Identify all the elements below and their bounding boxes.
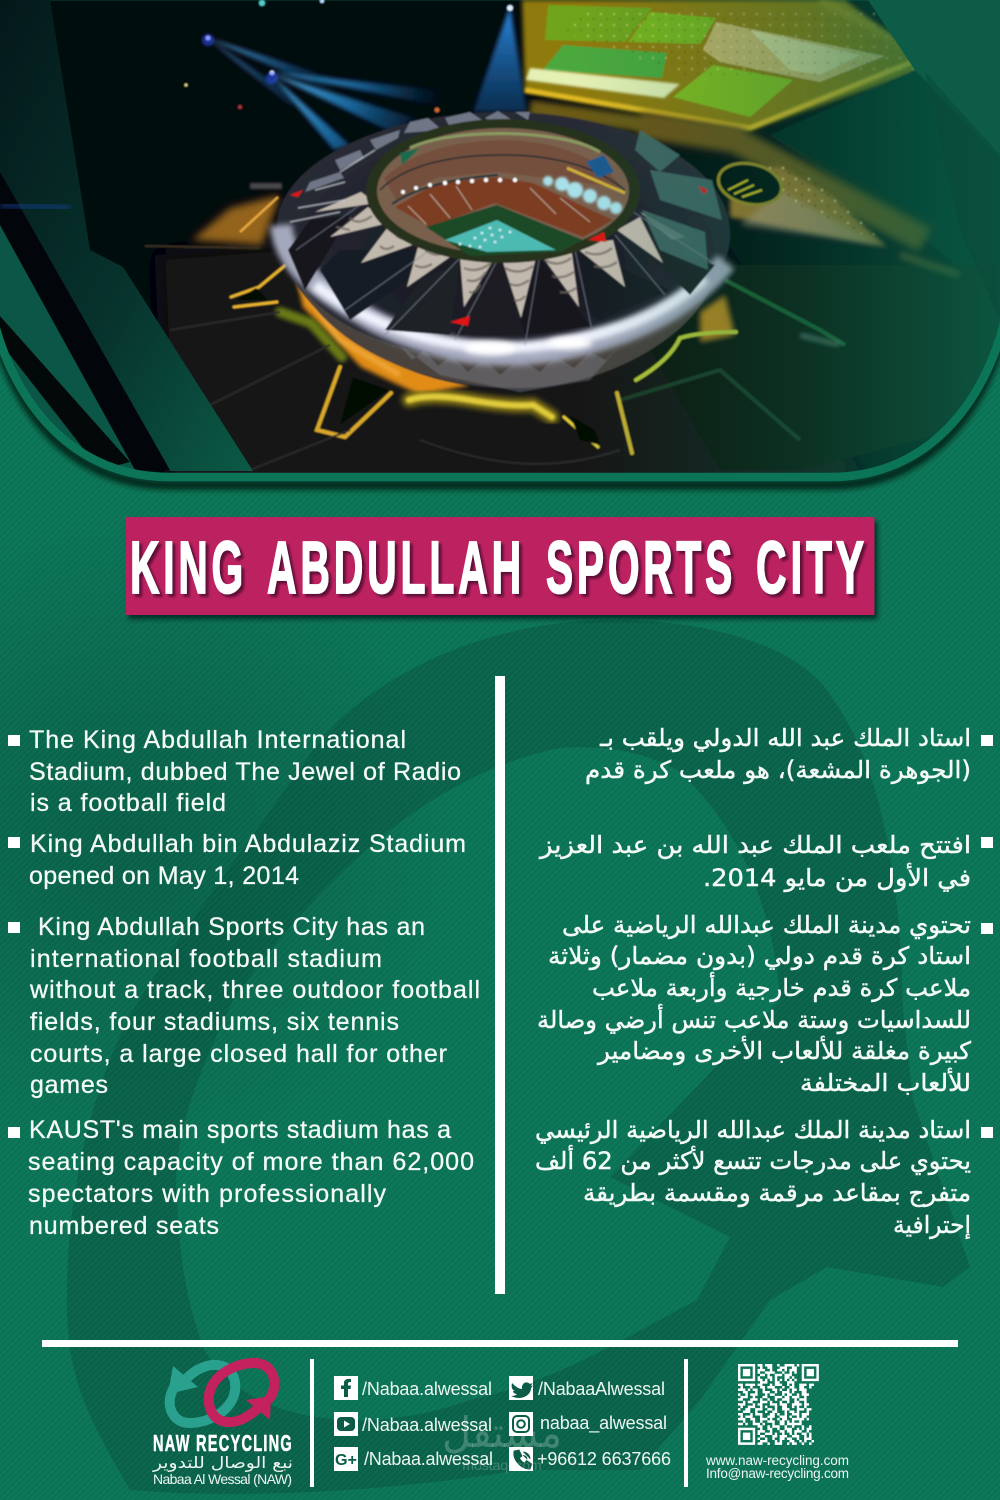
icon: twitter (511, 1382, 533, 1398)
social links: +96612 6637666 (537, 1449, 671, 1469)
panel: English text: King Abdullah Sports City has an (38, 913, 425, 941)
social links: /Nabaa.alwessal (364, 1449, 493, 1469)
watermark: mostaql: mostaql.com (462, 1457, 542, 1473)
logo: NAW Recycling: نبع الوصال للتدوير (152, 1453, 293, 1473)
central divider (495, 676, 505, 1294)
panel: English text: KAUST's main sports stadium has a (29, 1116, 451, 1144)
social links: nabaa_alwessal (540, 1413, 667, 1434)
logo: NAW Recycling: Nabaa Al Wessal (NAW) (153, 1471, 292, 1487)
upper tier stands (384, 140, 622, 200)
panel: Arabic text: استاد كرة قدم دولي (بدون مضمار) وثلاثة (548, 942, 971, 970)
panel: English text: is a football field (30, 789, 226, 817)
panel: Arabic text: للسداسيات وستة ملاعب تنس أرضي وصالة (537, 1004, 971, 1034)
icon: phone (514, 1450, 532, 1469)
logo: NAW Recycling (152, 1363, 293, 1487)
lower tier stands (395, 177, 613, 237)
pitch (426, 205, 583, 256)
stadium body (277, 111, 730, 392)
red lights (290, 186, 708, 326)
title text: ABDULLAH (267, 526, 525, 609)
photo frame shadow (0, 325, 1000, 485)
panel: Arabic text: ملاعب كرة قدم خارجية وأربعة ملاعب (592, 972, 971, 1002)
green overlay shards on right (605, 0, 1000, 473)
right plaza and oval (620, 70, 962, 457)
panel: Arabic text (535, 724, 993, 1240)
icon: instagram (513, 1416, 529, 1432)
title text: SPORTS (546, 526, 736, 609)
title banner (126, 517, 874, 615)
petals (315, 192, 686, 318)
logo mark: interlocking arrows (168, 1363, 274, 1423)
panel: English text: without a track, three outdoor football (29, 976, 480, 1004)
panel: Arabic text: تحتوي مدينة الملك عبدالله الرياضية على (562, 911, 971, 939)
panel: Arabic text: في الأول من مايو 2014. (703, 863, 971, 892)
apron lines (170, 312, 620, 470)
panel: Arabic text: استاد الملك عبد الله الدولي ويلقب بـ (599, 724, 971, 752)
watermark: mostaql: مستقل (442, 1408, 562, 1457)
title text: KING (130, 526, 247, 609)
website and email (705, 1453, 849, 1481)
social links: /Nabaa.alwessal (362, 1415, 492, 1435)
panel: English text: The King Abdullah International (29, 726, 406, 754)
QR code (738, 1365, 818, 1444)
sports fields, upper right (518, 0, 916, 134)
panel: English text: international football stadium (30, 945, 382, 973)
footer rule (42, 1340, 958, 1347)
panel: Arabic text: (الجوهرة المشعة)، هو ملعب كرة قدم (585, 756, 971, 784)
orange forecourt glow (296, 277, 470, 395)
hero photo: stadium at night (0, 0, 1000, 480)
left plaza lights (145, 183, 282, 248)
lower facade (300, 285, 712, 388)
stadium radial structure lines (296, 205, 712, 345)
panel: English text: seating capacity of more than 62,000 (28, 1148, 474, 1176)
panel: English text: numbered seats (29, 1212, 219, 1240)
website and email: www.naw-recycling.com (705, 1453, 849, 1468)
title text: CITY (756, 526, 868, 609)
upper back roof panels (305, 111, 530, 192)
panel: Arabic text: إحترافية (893, 1211, 971, 1240)
icon: youtube (337, 1417, 355, 1431)
icon: google plus: G+ (335, 1452, 357, 1469)
panel: Arabic text: كبيرة مغلقة للألعاب الأخرى ومضامير (597, 1036, 972, 1065)
panel: English text: opened on May 1, 2014 (29, 862, 299, 890)
stand lights and glass boxes (401, 178, 517, 194)
panel: English text: Stadium, dubbed The Jewel of Radio (29, 758, 461, 786)
panel: Arabic text: استاد مدينة الملك عبدالله الرياضية الرئيسي (535, 1116, 971, 1144)
panel: English text: games (30, 1071, 108, 1099)
panel: Arabic text: افتتح ملعب الملك عبد الله بن عبد العزيز (539, 831, 971, 859)
panel: English text: courts, a large closed hall for other (30, 1040, 447, 1068)
dark roof panels (288, 215, 350, 290)
social links: /NabaaAlwessal (538, 1379, 665, 1399)
panel: English text: spectators with professionally (28, 1180, 386, 1208)
panel: Arabic text: متفرج بمقاعد مرقمة ومقسمة بطريقة (583, 1179, 971, 1207)
panel: Arabic text: يحتوي على مدرجات تتسع لأكثر من 62 ألف (535, 1145, 971, 1175)
footer divider (310, 1359, 314, 1487)
icon: facebook (341, 1379, 351, 1397)
panel: English text: King Abdullah bin Abdulaziz Stadium (30, 830, 466, 858)
social links (334, 1376, 671, 1471)
green overlay shards on left (0, 0, 253, 471)
light beams (184, 0, 527, 150)
social handles: /Nabaa.alwessal (362, 1379, 492, 1399)
panel: English text: fields, four stadiums, six tennis (30, 1008, 399, 1036)
website and email: Info@naw-recycling.com (706, 1466, 849, 1481)
panel: Arabic text: للألعاب المختلفة (800, 1068, 971, 1097)
photo green frame band (0, 320, 1000, 477)
panel: English text (8, 726, 480, 1240)
glowing rim (281, 225, 726, 355)
logo wordmark: NAW RECYCLING (153, 1430, 293, 1456)
inner ring (366, 119, 640, 263)
footer divider (684, 1359, 688, 1487)
yellow lit walkways (231, 263, 736, 453)
